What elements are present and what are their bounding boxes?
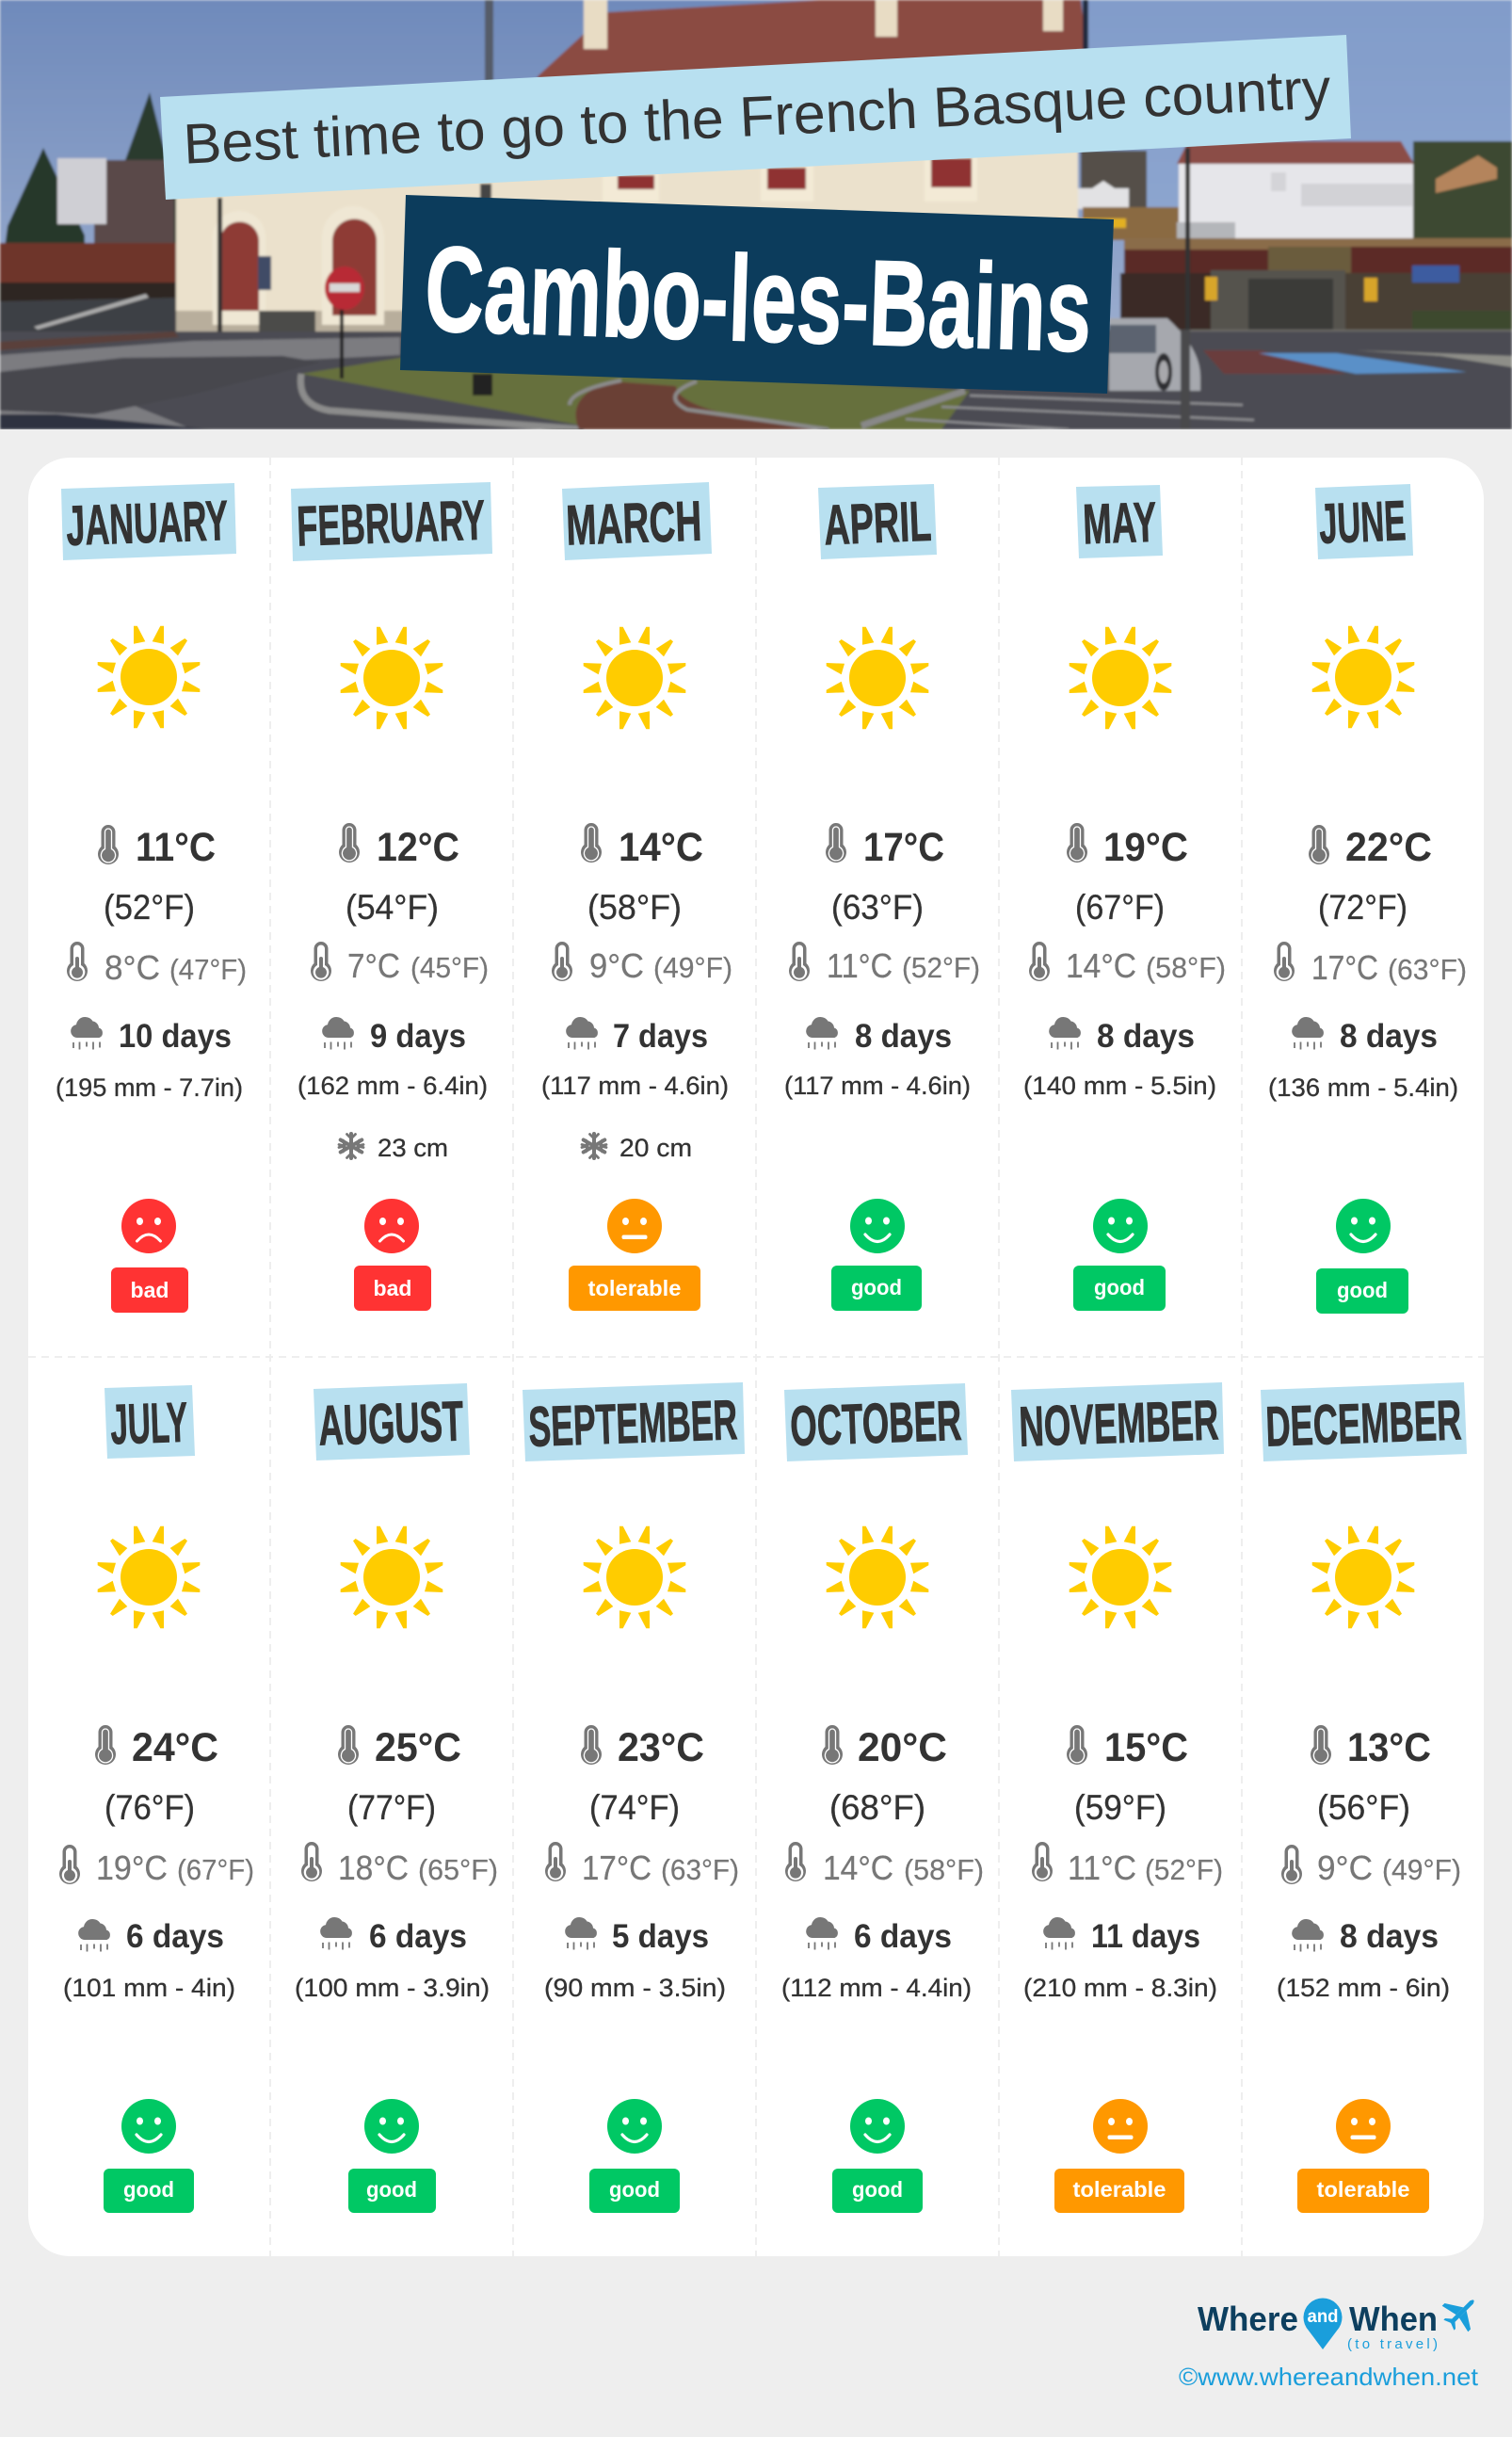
- icon: sun: [1312, 626, 1414, 728]
- rating badge: tolerable: [1073, 2177, 1166, 2202]
- rating badge: [831, 1266, 922, 1311]
- month label May: MAY: [1082, 491, 1157, 556]
- rating badge: [1054, 2169, 1184, 2213]
- rainfall: (162 mm - 6.4in): [298, 1072, 488, 1100]
- rainy days: 8 days: [855, 1018, 952, 1055]
- rating badge: tolerable: [1316, 2177, 1410, 2202]
- month: October: [781, 1383, 984, 2213]
- high temperature: 24°C: [132, 1725, 218, 1770]
- high temperature fahrenheit: (58°F): [587, 888, 682, 927]
- high temperature: 14°C: [619, 825, 703, 870]
- high temperature: 20°C: [858, 1725, 947, 1770]
- high temperature fahrenheit: (76°F): [105, 1788, 195, 1827]
- low temperature: (63°F): [1388, 953, 1467, 986]
- icon: rain cloud: [565, 1917, 597, 1949]
- icon: neutral face: [1093, 2099, 1148, 2154]
- low temperature: (67°F): [177, 1853, 254, 1886]
- month label June: [1315, 484, 1413, 559]
- rainy days: 10 days: [119, 1018, 232, 1055]
- header photo: Cambo-les-Bains station: [0, 0, 1512, 429]
- icon: rain cloud: [806, 1017, 838, 1049]
- icon: map pin with and: and: [1307, 2307, 1339, 2327]
- low temperature: (63°F): [661, 1853, 739, 1886]
- month label July: JULY: [109, 1391, 188, 1456]
- icon: thermometer low: [1274, 942, 1295, 981]
- low temperature: (58°F): [904, 1853, 984, 1886]
- month: April: [784, 484, 980, 1311]
- icon: airplane: [1436, 2287, 1487, 2338]
- high temperature: 19°C: [1103, 825, 1188, 870]
- city name text: Cambo-les-Bains: [423, 221, 1093, 378]
- low temperature: [823, 1848, 984, 1887]
- low temperature: [338, 1848, 498, 1887]
- icon: sad face: [121, 1199, 176, 1253]
- high temperature fahrenheit: (52°F): [104, 888, 195, 927]
- low temperature: [1317, 1848, 1461, 1887]
- icon: thermometer low: [59, 1845, 80, 1884]
- icon: sun: [584, 1526, 685, 1628]
- high temperature: 12°C: [377, 825, 459, 870]
- icon: thermometer high: [1311, 1725, 1331, 1765]
- month label January: [61, 483, 236, 560]
- month label September: SEPTEMBER: [527, 1388, 738, 1459]
- panel: calendar card: [28, 458, 1484, 2256]
- icon: rain cloud: [1292, 1017, 1324, 1049]
- icon: sun: [98, 626, 200, 728]
- rating badge: [832, 2169, 923, 2213]
- month: February: [291, 482, 492, 1311]
- month: January: [56, 483, 247, 1313]
- icon: sun: [341, 627, 442, 729]
- rating badge: good: [1337, 1278, 1388, 1302]
- rainy days: 9 days: [370, 1018, 466, 1055]
- month label March: MARCH: [565, 490, 702, 557]
- rainfall: (112 mm - 4.4in): [781, 1974, 972, 2002]
- rating badge: good: [851, 1275, 902, 1299]
- low temperature: (52°F): [1145, 1853, 1223, 1886]
- high temperature fahrenheit: (56°F): [1317, 1788, 1410, 1827]
- icon: thermometer low: [1032, 1842, 1053, 1881]
- rainfall: (136 mm - 5.4in): [1268, 1073, 1458, 1102]
- month label April: APRIL: [823, 490, 932, 557]
- high temperature fahrenheit: (59°F): [1074, 1788, 1166, 1827]
- month label June: JUNE: [1318, 489, 1407, 556]
- month label August: [314, 1383, 470, 1461]
- rainfall: (117 mm - 4.6in): [784, 1072, 971, 1100]
- icon: sad face: [364, 1199, 419, 1253]
- low temperature: 14°C: [823, 1848, 893, 1887]
- low temperature: 11°C: [1068, 1848, 1136, 1887]
- month: July: [59, 1385, 254, 2213]
- icon: snowflake: [339, 1134, 363, 1158]
- month: May: [1023, 485, 1226, 1311]
- icon: thermometer high: [822, 1725, 843, 1765]
- icon: thermometer high: [339, 823, 360, 863]
- month label August: AUGUST: [317, 1389, 464, 1458]
- low temperature: (58°F): [1146, 951, 1226, 984]
- icon: thermometer low: [311, 942, 331, 981]
- high temperature fahrenheit: (67°F): [1075, 888, 1165, 927]
- icon: thermometer low: [785, 1842, 806, 1881]
- icon: thermometer low: [552, 942, 572, 981]
- icon: neutral face: [1336, 2099, 1391, 2154]
- low temperature: [96, 1848, 254, 1887]
- rainfall: (101 mm - 4in): [63, 1974, 235, 2002]
- rainy days: 8 days: [1340, 1918, 1439, 1955]
- icon: thermometer low: [301, 1842, 322, 1881]
- low temperature: [105, 948, 247, 987]
- icon: rain cloud: [78, 1919, 110, 1951]
- low temperature: [589, 946, 732, 985]
- rainy days: 8 days: [1097, 1018, 1195, 1055]
- rating badge: good: [366, 2177, 417, 2202]
- rainy days: 11 days: [1091, 1918, 1200, 1955]
- month label November: NOVEMBER: [1018, 1388, 1219, 1459]
- month label September: [523, 1382, 745, 1461]
- rating badge: tolerable: [587, 1276, 682, 1300]
- month: June: [1268, 484, 1467, 1314]
- icon: happy face: [607, 2099, 662, 2154]
- rating badge: good: [609, 2177, 660, 2202]
- high temperature fahrenheit: (77°F): [347, 1788, 436, 1827]
- low temperature: 8°C: [105, 948, 160, 987]
- rainy days: 6 days: [369, 1918, 467, 1955]
- icon: thermometer high: [581, 1725, 602, 1765]
- low temperature: 19°C: [96, 1848, 168, 1887]
- low temperature: [1311, 948, 1467, 987]
- rating badge: [348, 2169, 436, 2213]
- rainy days: 6 days: [126, 1918, 224, 1955]
- logo tagline: (to travel): [1347, 2336, 1438, 2352]
- high temperature fahrenheit: (68°F): [829, 1788, 925, 1827]
- high temperature: 15°C: [1104, 1725, 1188, 1770]
- month: December: [1261, 1382, 1467, 2213]
- icon: happy face: [364, 2099, 419, 2154]
- low temperature: 7°C: [347, 946, 400, 985]
- month label October: [784, 1383, 968, 1461]
- icon: rain cloud: [1292, 1919, 1324, 1951]
- high temperature fahrenheit: (74°F): [589, 1788, 680, 1827]
- rainfall: (117 mm - 4.6in): [541, 1072, 729, 1100]
- low temperature: [347, 946, 489, 985]
- low temperature: 14°C: [1066, 946, 1136, 985]
- icon: rain cloud: [1049, 1017, 1081, 1049]
- low temperature: [582, 1848, 739, 1887]
- month label May: [1076, 485, 1163, 558]
- low temperature: (47°F): [169, 953, 247, 986]
- rating badge: bad: [131, 1278, 169, 1302]
- month: September: [523, 1382, 745, 2213]
- rainfall: (140 mm - 5.5in): [1023, 1072, 1216, 1100]
- icon: thermometer high: [98, 825, 119, 864]
- icon: thermometer high: [1309, 825, 1329, 864]
- rating badge: [1316, 1268, 1408, 1314]
- month label April: [818, 484, 937, 559]
- month: August: [295, 1383, 498, 2213]
- icon: sun: [827, 627, 928, 729]
- low temperature: [1066, 946, 1226, 985]
- icon: thermometer high: [95, 1725, 116, 1765]
- icon: neutral face: [607, 1199, 662, 1253]
- rainy days: 5 days: [612, 1918, 709, 1955]
- low temperature: 9°C: [589, 946, 644, 985]
- rating badge: good: [852, 2177, 903, 2202]
- icon: happy face: [850, 2099, 905, 2154]
- month label February: FEBRUARY: [296, 489, 486, 557]
- icon: sun: [341, 1526, 442, 1628]
- high temperature: 25°C: [375, 1725, 461, 1770]
- icon: happy face: [1336, 1199, 1391, 1253]
- rainfall: (100 mm - 3.9in): [295, 1974, 490, 2002]
- high temperature: 13°C: [1347, 1725, 1431, 1770]
- rainfall: (90 mm - 3.5in): [544, 1974, 726, 2002]
- high temperature fahrenheit: (54°F): [346, 888, 439, 927]
- icon: sun: [1070, 627, 1171, 729]
- low temperature: 17°C: [1311, 948, 1378, 987]
- logo word When: When: [1349, 2300, 1438, 2338]
- icon: sun: [584, 627, 685, 729]
- rating badge: good: [1094, 1275, 1145, 1299]
- rainy days: 6 days: [854, 1918, 952, 1955]
- icon: happy face: [850, 1199, 905, 1253]
- logo word Where: Where: [1198, 2300, 1298, 2338]
- footer logo: Where and When: [1198, 2287, 1487, 2352]
- snowfall: 20 cm: [619, 1134, 692, 1162]
- snowfall: 23 cm: [378, 1134, 448, 1162]
- rating badge: [111, 1267, 188, 1313]
- month label July: [105, 1385, 195, 1459]
- month label February: [291, 482, 492, 561]
- icon: thermometer high: [1067, 1725, 1087, 1765]
- icon: happy face: [121, 2099, 176, 2154]
- icon: sun: [827, 1526, 928, 1628]
- icon: rain cloud: [1043, 1917, 1075, 1949]
- month label November: [1011, 1382, 1224, 1461]
- low temperature: (49°F): [1382, 1853, 1461, 1886]
- icon: rain cloud: [806, 1917, 838, 1949]
- rating badge: [569, 1266, 700, 1311]
- rating badge: good: [123, 2177, 174, 2202]
- subtitle text: Best time to go to the French Basque country: [182, 56, 1332, 176]
- rainfall: (210 mm - 8.3in): [1023, 1974, 1217, 2002]
- low temperature: 17°C: [582, 1848, 651, 1887]
- icon: sun: [98, 1526, 200, 1628]
- rainfall: (152 mm - 6in): [1277, 1974, 1450, 2002]
- low temperature: 18°C: [338, 1848, 409, 1887]
- icon: rain cloud: [322, 1017, 354, 1049]
- icon: snowflake: [582, 1134, 606, 1158]
- low temperature: (49°F): [653, 951, 732, 984]
- title banner: subtitle: [160, 35, 1351, 200]
- icon: happy face: [1093, 1199, 1148, 1253]
- icon: thermometer high: [338, 1725, 359, 1765]
- low temperature: 11°C: [827, 946, 893, 985]
- low temperature: (65°F): [418, 1853, 498, 1886]
- low temperature: 9°C: [1317, 1848, 1373, 1887]
- rating badge: [1297, 2169, 1429, 2213]
- icon: sun: [1312, 1526, 1414, 1628]
- rating badge: [1073, 1266, 1166, 1311]
- high temperature: 17°C: [863, 825, 944, 870]
- icon: rain cloud: [71, 1017, 103, 1049]
- title banner: city name: [400, 195, 1114, 394]
- month label March: [562, 482, 712, 560]
- icon: rain cloud: [320, 1917, 352, 1949]
- rainy days: 8 days: [1340, 1018, 1438, 1055]
- rating badge: [104, 2169, 194, 2213]
- icon: thermometer low: [67, 942, 88, 981]
- low temperature: [1068, 1848, 1223, 1887]
- month label October: OCTOBER: [789, 1389, 962, 1458]
- high temperature: 22°C: [1345, 825, 1432, 870]
- high temperature: 11°C: [136, 825, 216, 870]
- icon: thermometer high: [581, 823, 602, 863]
- icon: rain cloud: [566, 1017, 598, 1049]
- month: November: [1011, 1382, 1224, 2213]
- low temperature: (52°F): [902, 951, 980, 984]
- high temperature fahrenheit: (63°F): [831, 888, 924, 927]
- icon: thermometer low: [1281, 1845, 1302, 1884]
- high temperature fahrenheit: (72°F): [1318, 888, 1407, 927]
- month label January: JANUARY: [65, 489, 229, 557]
- icon: thermometer high: [826, 823, 846, 863]
- rainfall: (195 mm - 7.7in): [56, 1073, 243, 1102]
- icon: thermometer low: [789, 942, 810, 981]
- icon: thermometer high: [1067, 823, 1087, 863]
- rating badge: bad: [374, 1276, 411, 1300]
- low temperature: (45°F): [410, 951, 489, 984]
- month: March: [541, 482, 732, 1311]
- rating badge: [354, 1266, 431, 1311]
- icon: sun: [1070, 1526, 1171, 1628]
- website credit: ©www.whereandwhen.net: [1179, 2363, 1479, 2391]
- icon: map pin with and: [1304, 2299, 1343, 2349]
- rainy days: 7 days: [613, 1018, 708, 1055]
- low temperature: [827, 946, 980, 985]
- icon: thermometer low: [545, 1842, 566, 1881]
- icon: thermometer low: [1029, 942, 1050, 981]
- high temperature: 23°C: [618, 1725, 704, 1770]
- rating badge: [589, 2169, 680, 2213]
